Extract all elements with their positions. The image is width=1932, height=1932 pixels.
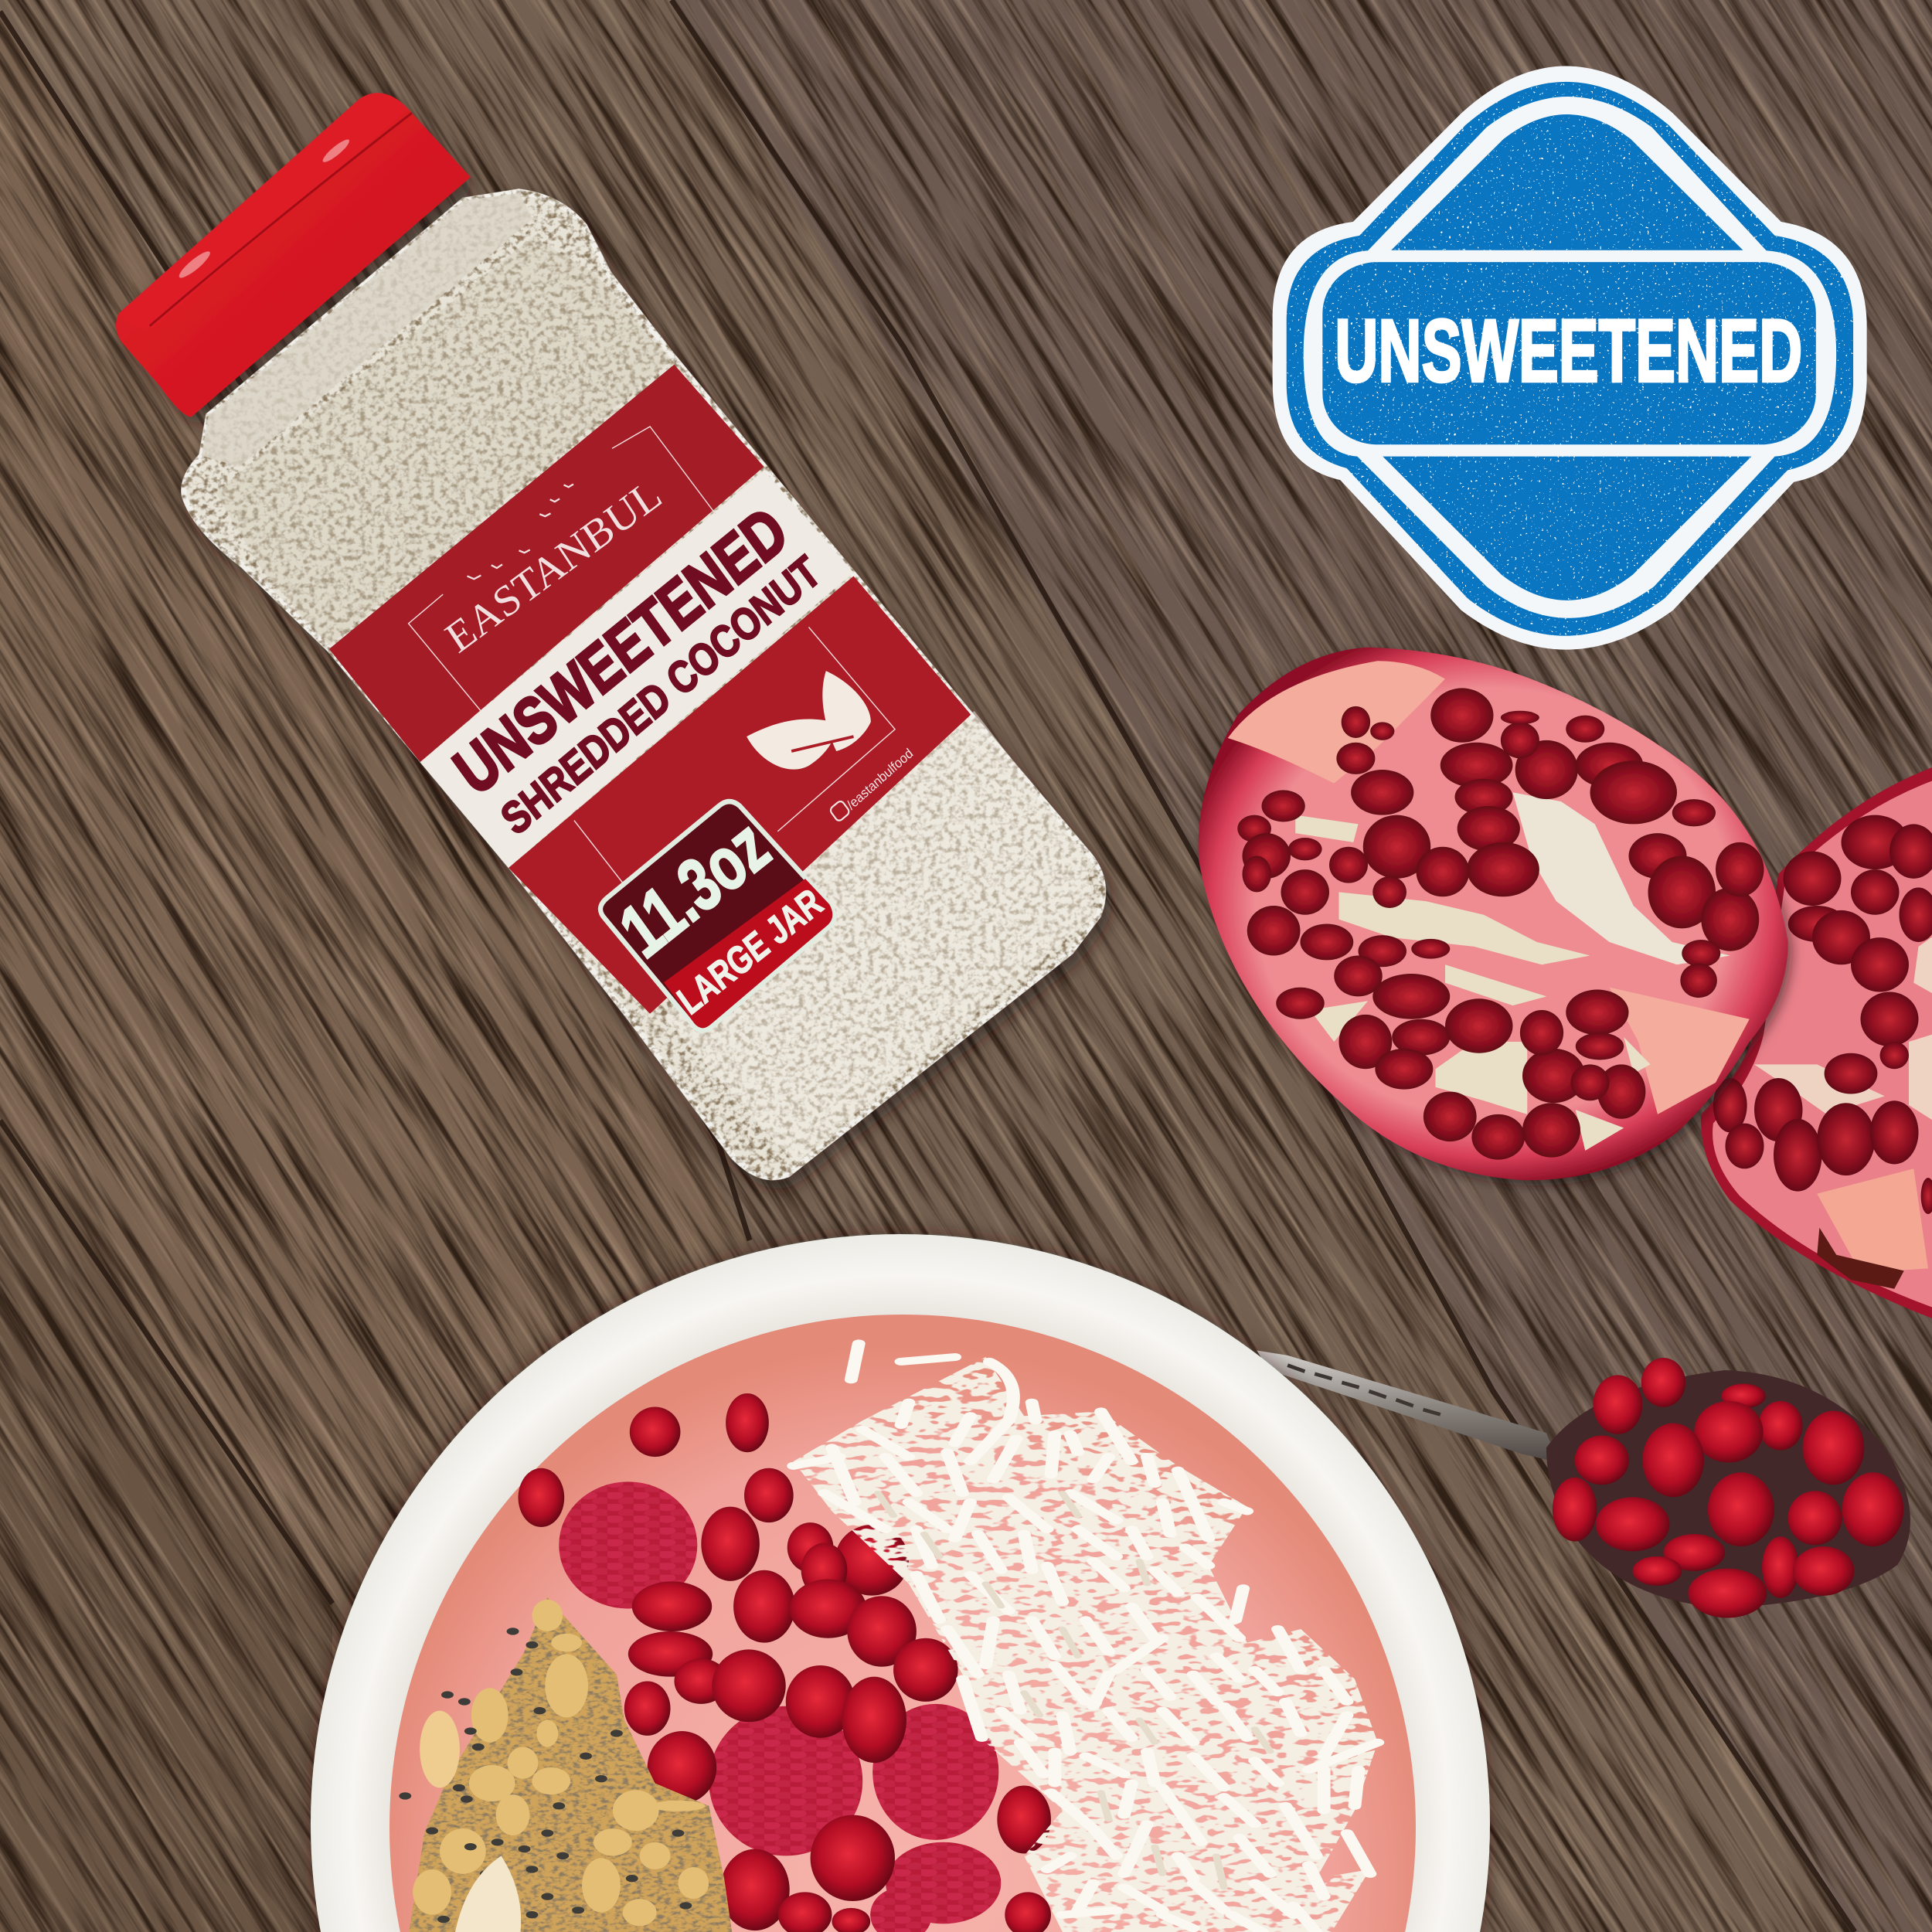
cream membrane [1513, 792, 1730, 964]
granola base [409, 1597, 732, 1932]
second half cream [1754, 933, 1932, 1124]
almond slice [455, 1855, 521, 1932]
outer rind [1199, 648, 1788, 1180]
bowl rim [311, 1234, 1490, 1932]
pomegranate seeds [519, 1393, 1051, 1932]
second half pith [1713, 779, 1932, 1309]
sticker lower blue panel [1383, 457, 1751, 600]
sticker inner white band [1304, 97, 1836, 618]
lower coconut bright [664, 711, 1095, 1163]
instagram icon [829, 800, 850, 822]
bowl toppings [405, 1343, 1378, 1932]
second half peach flesh [1817, 1168, 1928, 1273]
sticker white outline [1273, 66, 1867, 650]
spoon handle [1257, 1350, 1559, 1463]
badge weight: 11.3oz [606, 804, 784, 974]
raspberries [559, 1481, 1001, 1932]
spoon with pomegranate seeds [1257, 1350, 1910, 1617]
size badge [600, 801, 835, 1031]
label frame lines [409, 427, 895, 883]
spoon seeds [1553, 1358, 1903, 1617]
product subtitle: SHREDDED COCONUT [492, 546, 829, 845]
social handle: /eastanbulfood [844, 745, 916, 813]
sticker center blue pill [1322, 262, 1816, 444]
left plank tone [0, 12, 750, 1932]
smoothie bowl [311, 1234, 1490, 1932]
cap highlights [176, 137, 352, 281]
brand name: EASTANBUL [437, 470, 670, 662]
granola chunks [413, 1600, 709, 1926]
jar cap [116, 93, 471, 417]
label white band [420, 471, 854, 868]
main half arils [1237, 688, 1764, 1160]
label upper red band [329, 365, 764, 762]
cap top rim [119, 93, 409, 328]
second half arils [1713, 815, 1932, 1214]
chia seeds [405, 1631, 685, 1920]
spoon handle engraving [1287, 1366, 1440, 1414]
cream membrane lower [1295, 815, 1651, 1151]
upper coconut shade [216, 237, 671, 645]
pomegranate second half [1701, 765, 1932, 1321]
cap seam [150, 113, 412, 326]
right plank tone [672, 0, 1932, 1932]
sticker upper blue panel [1391, 114, 1743, 250]
coconut flake shadows [878, 1493, 1270, 1887]
pomegranate main half [1199, 648, 1788, 1180]
badge red strip [664, 879, 832, 1028]
peach flesh [1228, 661, 1750, 1114]
jar body [184, 192, 1103, 1177]
neck clear plastic [202, 193, 532, 467]
icon: leaves [747, 671, 871, 770]
unsweetened sticker [1262, 54, 1881, 662]
product title: UNSWEETENED [441, 492, 800, 808]
label lower red band [509, 576, 971, 1014]
spoon bowl [1546, 1370, 1910, 1608]
badge large jar: LARGE JAR [670, 880, 830, 1023]
coconut flakes [794, 1343, 1378, 1932]
lower-left plank tone [0, 1121, 332, 1932]
smoothie surface [389, 1315, 1416, 1932]
brand birds [467, 485, 573, 579]
second half dark notch [1817, 1228, 1904, 1289]
product jar [116, 93, 1103, 1177]
sticker blue ring [1287, 82, 1853, 636]
shredded coconut base [794, 1357, 1378, 1932]
